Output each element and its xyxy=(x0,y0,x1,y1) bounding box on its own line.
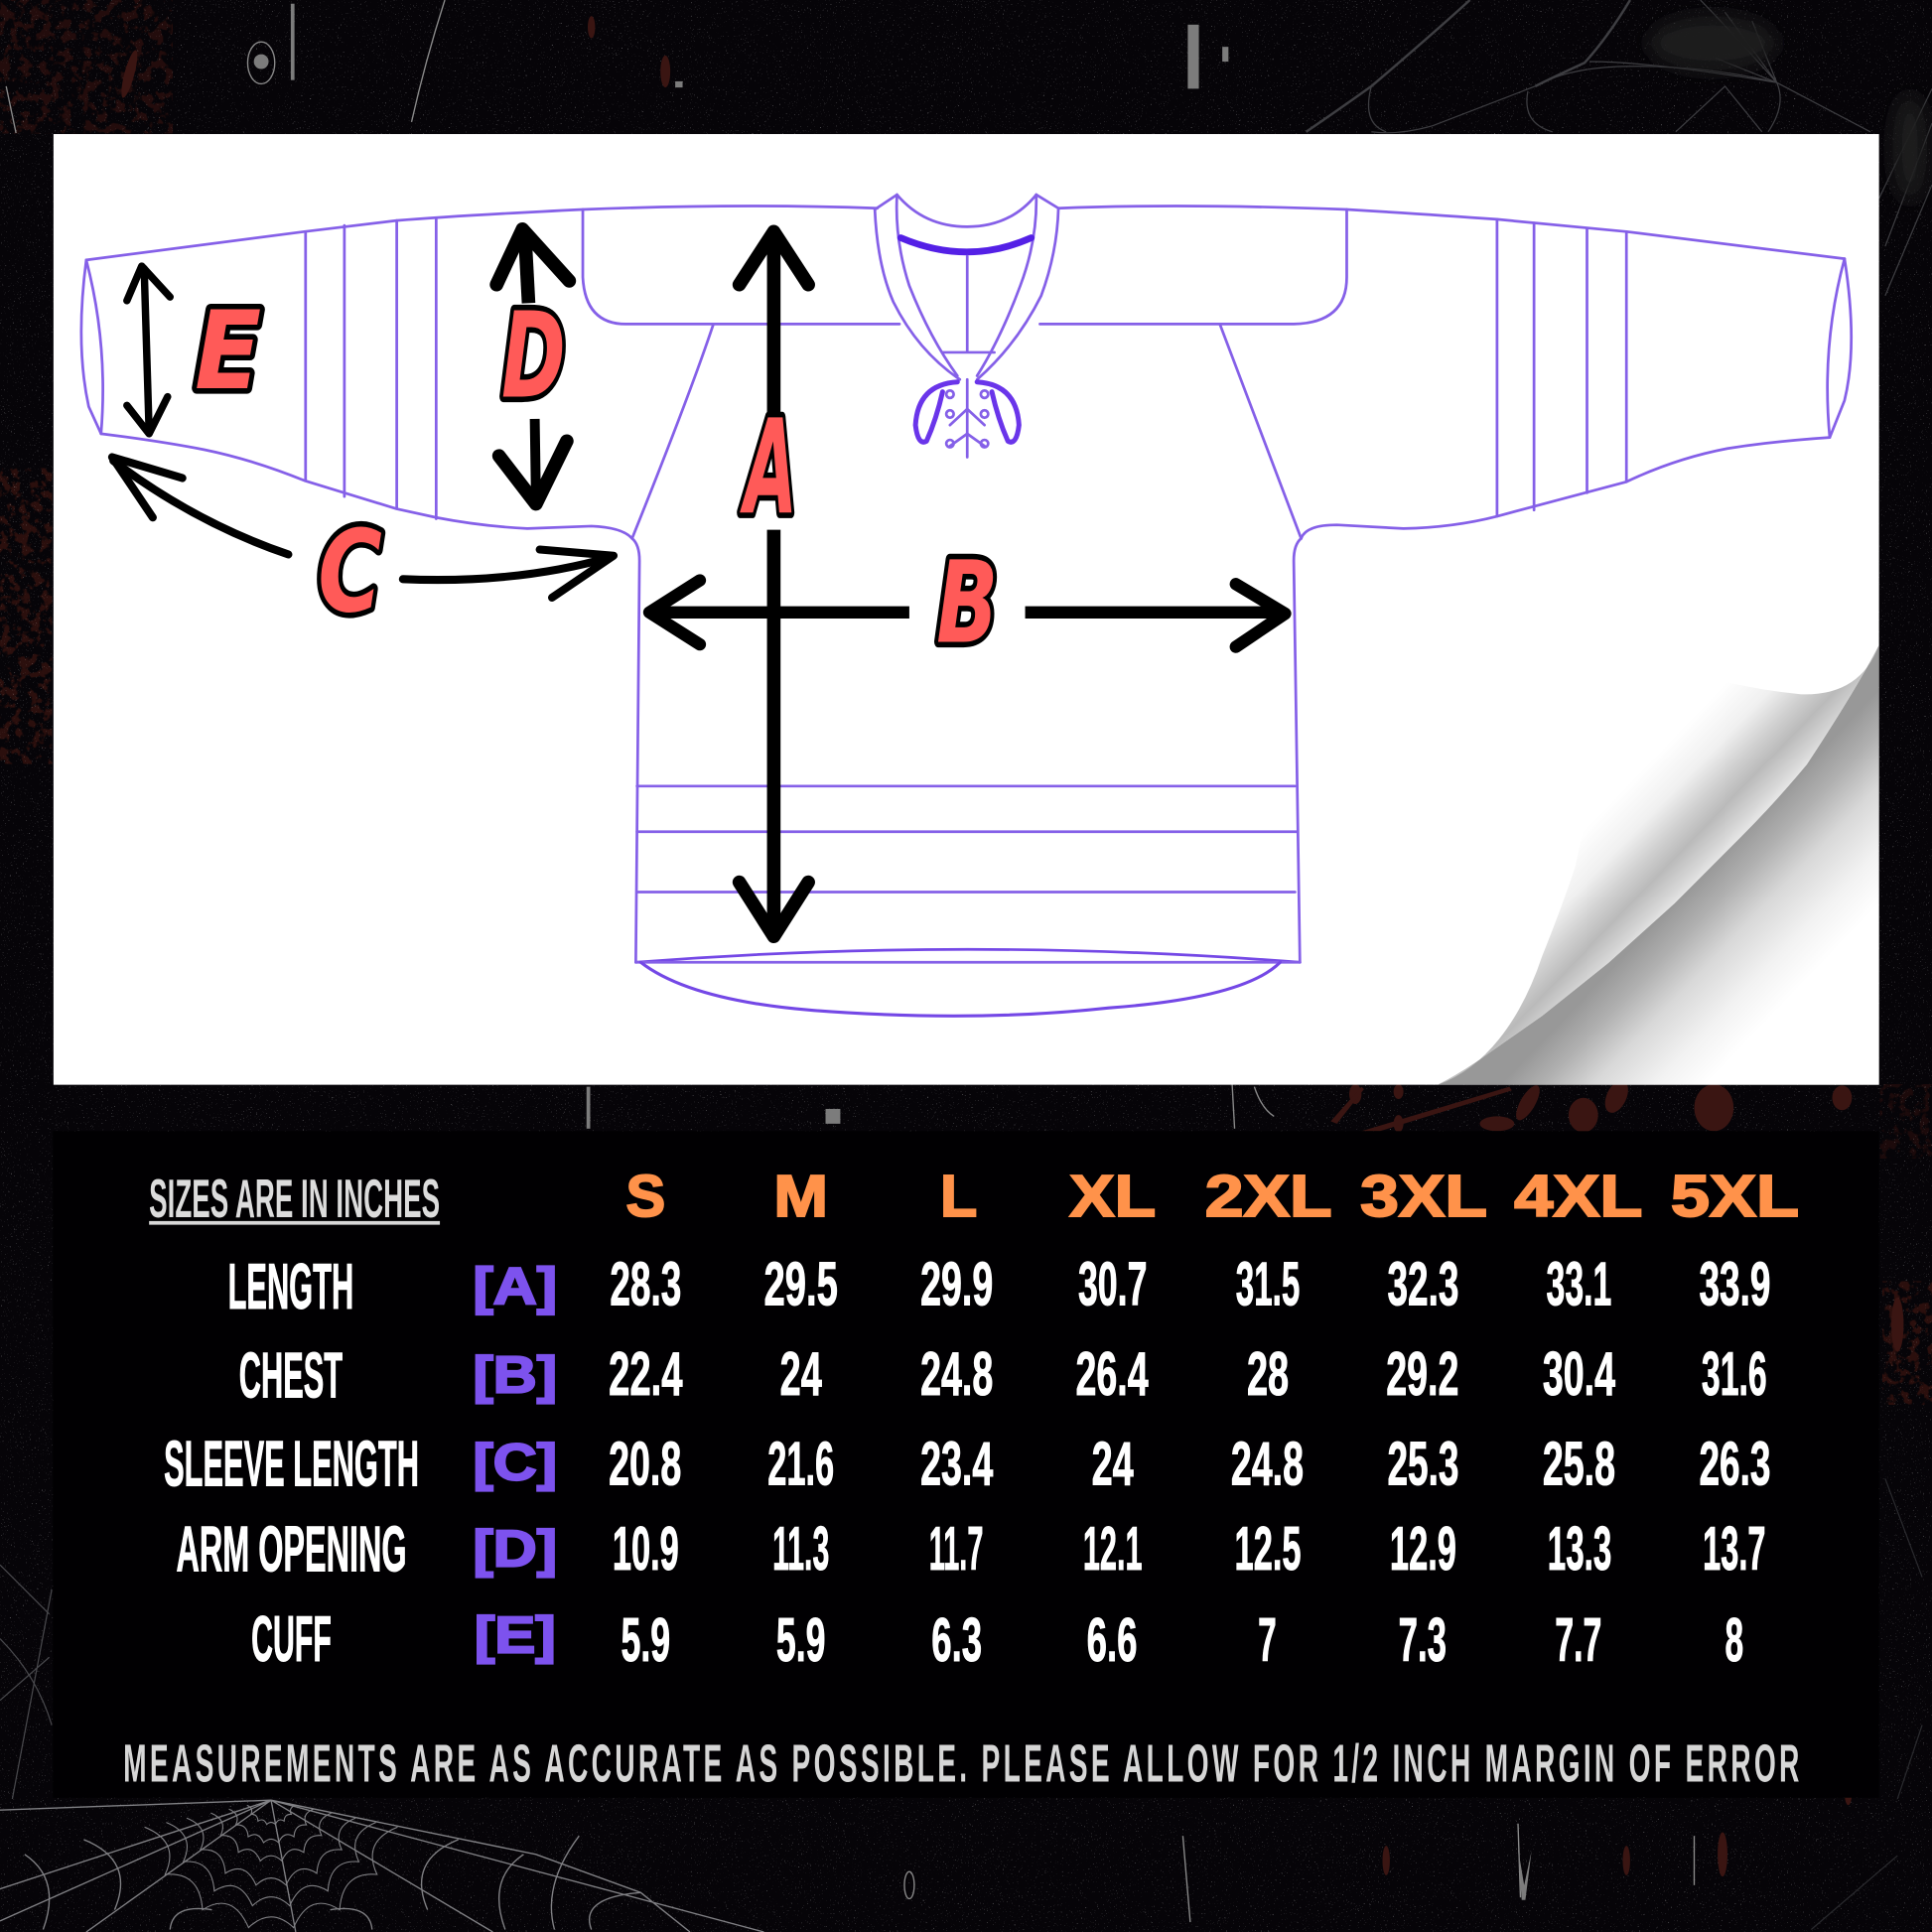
row: length: 29.9 xyxy=(920,1250,993,1318)
size headers xyxy=(625,1163,1799,1229)
letter B: B xyxy=(936,537,998,669)
jersey outline drawing xyxy=(81,195,1852,1016)
row: chest: 24.8 xyxy=(920,1340,993,1409)
row: cuff: 7.3 xyxy=(1399,1606,1447,1675)
row: arm opening: 11.3 xyxy=(772,1515,829,1584)
row: arm opening xyxy=(176,1513,1765,1585)
row: arm opening: ARM OPENING xyxy=(176,1513,407,1585)
size headers: 3XL xyxy=(1360,1163,1487,1229)
size headers: 2XL xyxy=(1205,1163,1332,1229)
row: sleeve length: 25.8 xyxy=(1543,1430,1615,1498)
row: cuff: 8 xyxy=(1725,1606,1743,1675)
row: arm opening: [D] xyxy=(474,1520,557,1578)
row: chest: 30.4 xyxy=(1543,1340,1615,1409)
size headers: M xyxy=(773,1163,828,1229)
row: arm opening: 13.7 xyxy=(1703,1515,1765,1584)
jersey body and yoke xyxy=(583,209,1346,1016)
arrow: D arm opening xyxy=(496,229,569,504)
row: sleeve length: [C] xyxy=(474,1435,557,1492)
row: sleeve length: 23.4 xyxy=(920,1430,994,1498)
row: chest: 26.4 xyxy=(1075,1340,1149,1409)
panel: white jersey diagram sheet xyxy=(54,134,1879,1085)
row: arm opening: 11.7 xyxy=(929,1515,983,1584)
row: cuff: 6.3 xyxy=(931,1606,982,1675)
row: length: 29.5 xyxy=(763,1250,838,1318)
row: sleeve length xyxy=(164,1429,1770,1500)
row: chest: CHEST xyxy=(239,1339,343,1411)
row: arm opening: 12.9 xyxy=(1390,1515,1456,1584)
decorative spider web: top right xyxy=(1307,0,1932,296)
row: length: [A] xyxy=(474,1258,557,1315)
row: sleeve length: 21.6 xyxy=(767,1430,834,1498)
arrow: C sleeve length xyxy=(112,457,614,598)
size headers: S xyxy=(625,1163,665,1229)
page curl in bottom-right corner xyxy=(1438,645,1879,1085)
letter labels on diagram xyxy=(195,288,998,669)
row: sleeve length: 20.8 xyxy=(609,1430,681,1498)
arrow: B chest width xyxy=(649,581,1285,647)
row: cuff xyxy=(251,1603,1743,1675)
row: arm opening: 12.1 xyxy=(1083,1515,1142,1584)
row: cuff: 5.9 xyxy=(776,1606,826,1675)
letter C: C xyxy=(318,506,382,638)
size headers: XL xyxy=(1069,1163,1156,1229)
row: chest: [B] xyxy=(474,1346,557,1404)
row: chest: 31.6 xyxy=(1702,1340,1767,1409)
letter E: E xyxy=(195,288,261,414)
row: length: 33.9 xyxy=(1699,1250,1770,1318)
row: length: LENGTH xyxy=(228,1251,353,1322)
row: arm opening: 13.3 xyxy=(1548,1515,1611,1584)
row: length: 32.3 xyxy=(1387,1250,1458,1318)
row: chest: 29.2 xyxy=(1386,1340,1458,1409)
row: arm opening: 10.9 xyxy=(613,1515,679,1584)
row: length xyxy=(228,1250,1770,1322)
size headers: L xyxy=(940,1163,977,1229)
arrow: A length xyxy=(740,231,808,936)
row: chest: 22.4 xyxy=(609,1340,683,1409)
row: length: 31.5 xyxy=(1236,1250,1300,1318)
row: chest xyxy=(239,1339,1767,1411)
row: chest: 24 xyxy=(780,1340,822,1409)
row: cuff: [E] xyxy=(475,1606,556,1664)
row: cuff: 6.6 xyxy=(1087,1606,1138,1675)
row: cuff: 7 xyxy=(1258,1606,1277,1675)
size headers: 5XL xyxy=(1671,1163,1799,1229)
size headers: 4XL xyxy=(1514,1163,1642,1229)
row: chest: 28 xyxy=(1247,1340,1289,1409)
row: cuff: 7.7 xyxy=(1555,1606,1601,1675)
left sleeve outline xyxy=(81,207,878,538)
row: length: 33.1 xyxy=(1547,1250,1611,1318)
table note: sizes are in inches: SIZES ARE IN INCHES xyxy=(149,1169,440,1229)
decorative spider web: bottom left xyxy=(0,1478,1922,1932)
row: cuff: CUFF xyxy=(251,1603,332,1675)
row: length: 30.7 xyxy=(1078,1250,1147,1318)
row: sleeve length: 24.8 xyxy=(1231,1430,1304,1498)
letter D: D xyxy=(501,288,566,426)
row: arm opening: 12.5 xyxy=(1235,1515,1302,1584)
row: sleeve length: SLEEVE LENGTH xyxy=(164,1429,419,1500)
arrow: E cuff xyxy=(127,266,170,434)
row: sleeve length: 25.3 xyxy=(1387,1430,1458,1498)
row: sleeve length: 26.3 xyxy=(1699,1430,1770,1498)
row: length: 28.3 xyxy=(610,1250,681,1318)
row: sleeve length: 24 xyxy=(1092,1430,1134,1498)
row: cuff: 5.9 xyxy=(621,1606,670,1675)
right sleeve outline xyxy=(1058,207,1852,538)
collar and lacing xyxy=(875,195,1058,457)
panel: size table xyxy=(53,1131,1879,1798)
letter A: A xyxy=(740,392,797,544)
table note: sizes are in inches xyxy=(149,1169,440,1229)
